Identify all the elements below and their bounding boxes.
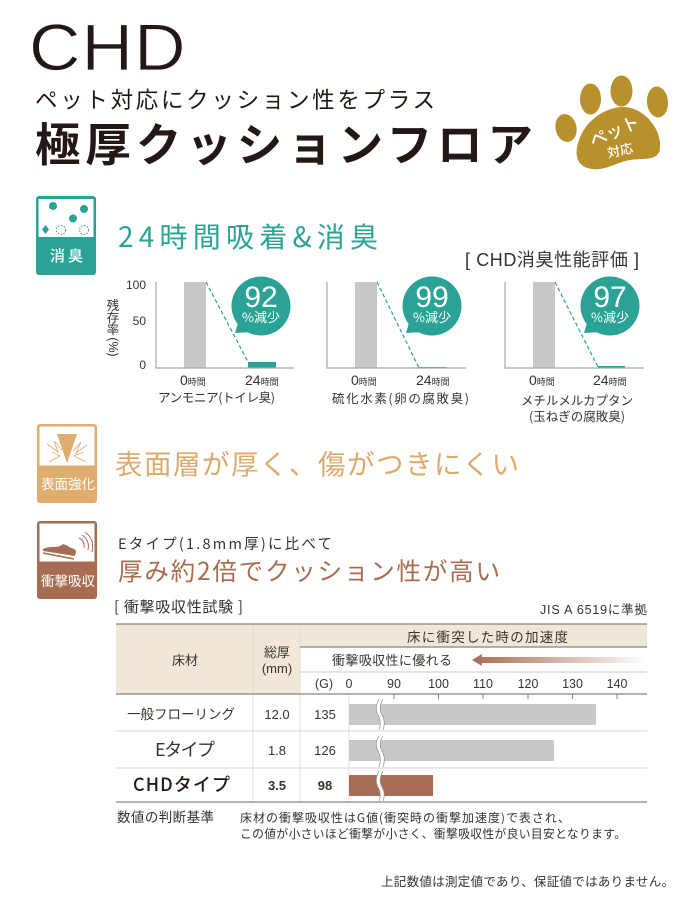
panel: surface strength icon [37, 424, 97, 503]
panel: deodorizing icon [36, 196, 96, 275]
chart: hydrogen sulfide 99 [327, 276, 469, 407]
axis scale: 100 [428, 677, 449, 691]
arrow: better absorption direction [472, 654, 647, 666]
axis scale: 110 [473, 677, 493, 691]
chart: ammonia 92 [156, 276, 294, 406]
chart: hydrogen sulfide 99: 0時間 [351, 372, 377, 388]
table header labels: 総厚 [264, 642, 290, 661]
table title: [ 衝撃吸収性試験 ] [114, 596, 243, 617]
chart: hydrogen sulfide 99: 硫化水素(卵の腐敗臭) [332, 388, 469, 407]
footnote: judgment criteria [117, 806, 626, 842]
footnote: judgment criteria: 床材の衝撃吸収性はG値(衝突時の衝撃加速度)で表され、 [240, 809, 570, 826]
y axis labels: (%) [106, 337, 120, 357]
row: general flooring: 12.0 [264, 707, 290, 722]
chart: methyl mercaptan 97: 24時間 [593, 372, 627, 388]
logo: CHD: CHD [29, 10, 186, 84]
row: general flooring: 一般フローリング [127, 703, 235, 723]
disclaimer: 上記数値は測定値であり、保証値ではありません。 [381, 871, 674, 890]
axis scale: 130 [562, 677, 583, 691]
chart: methyl mercaptan 97 [505, 276, 644, 425]
footnote: judgment criteria: この値が小さいほど衝撃が小さく、衝撃吸収性が良い目安となります。 [240, 825, 626, 842]
callout: 97: 97 [593, 281, 627, 314]
row: general flooring: 135 [314, 707, 336, 722]
chart: ammonia 92: 0時間 [180, 372, 206, 388]
y axis labels: 存 [107, 307, 119, 326]
chart: methyl mercaptan 97: 0時間 [529, 372, 555, 388]
y axis labels: 0 [139, 358, 146, 372]
panel: impact absorption icon [37, 521, 97, 599]
chart: hydrogen sulfide 99: 24時間 [416, 372, 450, 388]
y axis labels: 残 [107, 295, 120, 314]
chart: methyl mercaptan 97: (玉ねぎの腐敗臭) [529, 406, 625, 425]
row: E type: 1.8 [268, 743, 286, 758]
row: CHD type: 98 [318, 778, 332, 793]
y axis labels: 50 [133, 314, 146, 328]
axis scale: 0 [346, 677, 353, 691]
callout: 97 [580, 276, 640, 336]
axis scale: 140 [607, 677, 627, 691]
chart: ammonia 92: 24時間 [245, 372, 279, 388]
axis scale [346, 677, 627, 691]
y axis labels [106, 278, 146, 372]
table header labels [172, 626, 568, 691]
panel: deodorizing icon: 消臭 [50, 245, 83, 266]
subtitle: ペット対応にクッション性をプラス [35, 83, 435, 115]
callout: 92: 92 [244, 281, 278, 314]
table header labels: 衝撃吸収性に優れる [332, 650, 452, 669]
panel: impact absorption icon: 衝撃吸収 [41, 570, 96, 590]
callout: 99: 99 [415, 281, 449, 314]
row: E type: 126 [314, 743, 336, 758]
callout: 92: %減少 [242, 307, 280, 326]
panel: surface strength icon: 表面強化 [41, 473, 96, 493]
row: CHD type: 3.5 [268, 778, 286, 793]
heading: deodorizing: 24時間吸着&消臭 [118, 216, 378, 256]
callout: 97: %減少 [591, 307, 629, 326]
row: E type: Eタイプ [155, 736, 215, 762]
axis scale: 90 [387, 677, 401, 691]
row: CHD type: CHDタイプ [133, 771, 230, 797]
row: CHD type [133, 771, 433, 801]
icon: paw badge: ペット [585, 109, 643, 153]
y axis labels: 率 [107, 319, 119, 338]
table header labels: (mm) [262, 661, 292, 676]
chart: methyl mercaptan 97: メチルメルカプタン [521, 390, 633, 409]
table header labels: (G) [315, 677, 333, 691]
callout: 99: %減少 [413, 307, 451, 326]
table: impact absorption test [116, 624, 647, 802]
table header labels: 床に衝突した時の加速度 [407, 626, 568, 646]
text: comparison lead-in: Eタイプ(1.8mm厚)に比べて [118, 533, 332, 554]
footnote: judgment criteria: 数値の判断基準 [117, 806, 214, 826]
heading: surface strength: 表面層が厚く、傷がつきにくい [115, 442, 519, 482]
chart title: [ CHD消臭性能評価 ] [465, 250, 639, 270]
callout: 99 [402, 276, 462, 336]
table header labels: 床材 [172, 650, 198, 669]
row: E type [155, 736, 554, 767]
heading: impact absorption: 厚み約2倍でクッション性が高い [118, 553, 500, 588]
main title: 極厚クッションフロア [35, 109, 533, 175]
row: general flooring [127, 699, 596, 730]
axis scale: 120 [518, 677, 538, 691]
icon: paw badge: 対応 [605, 138, 635, 162]
callout: 92 [232, 276, 290, 336]
icon: paw badge [553, 76, 669, 169]
y axis labels: 100 [126, 278, 146, 292]
chart: ammonia 92: アンモニア(トイレ臭) [158, 387, 275, 406]
standard note: JIS A 6519に準拠 [540, 602, 647, 617]
